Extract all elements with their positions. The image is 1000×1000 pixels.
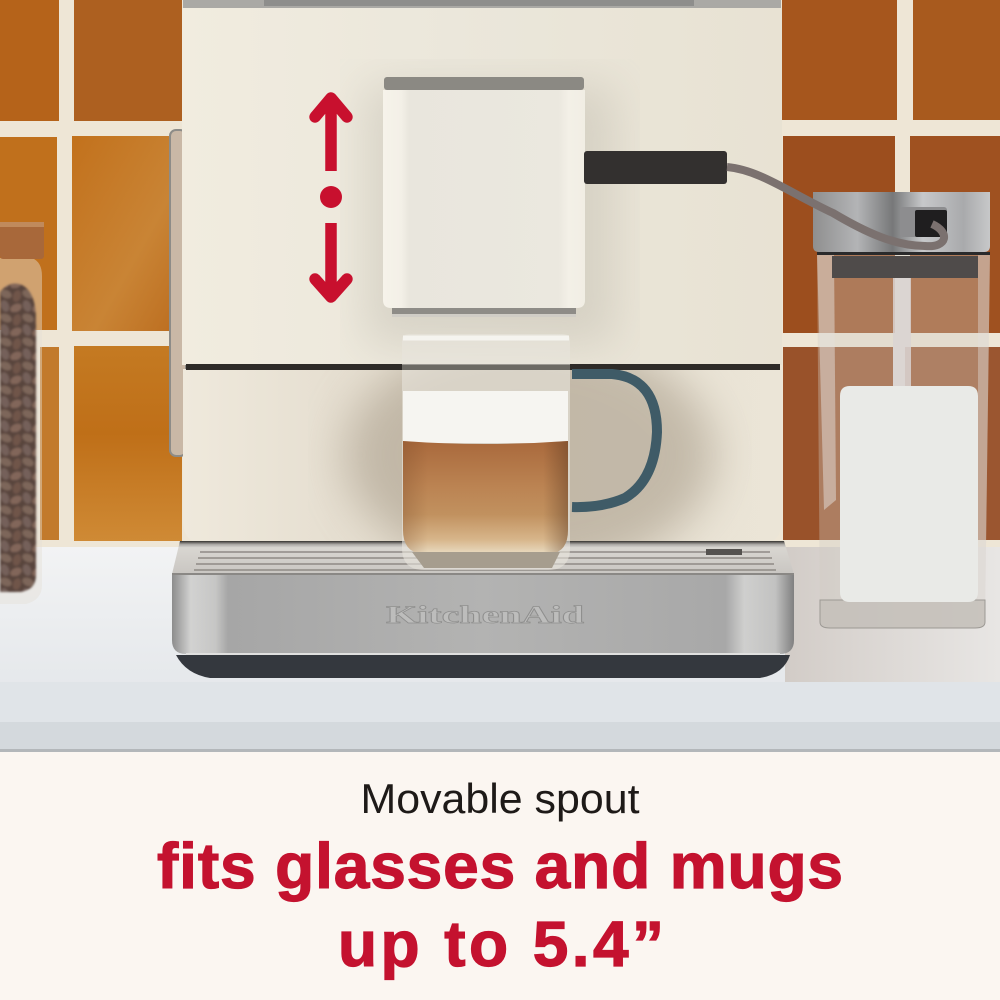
machine upper body: [182, 8, 636, 365]
machine body seam: [186, 364, 780, 370]
drip tray: [172, 541, 794, 678]
headline: fits glasses and mugs: [157, 830, 843, 902]
countertop: [0, 547, 1000, 752]
icon: coffee bean jar: [0, 222, 44, 604]
machine side handle: [170, 130, 186, 456]
spout: [383, 77, 585, 317]
brand name: KitchenAid: [386, 602, 584, 629]
milk container: [727, 167, 990, 628]
machine top trim: [183, 0, 781, 8]
icon: up and down arrows: [309, 98, 353, 297]
caption panel: [0, 752, 1000, 1000]
milk hose connector: [584, 151, 727, 184]
machine lower body: [183, 369, 739, 541]
headline: up to 5.4”: [338, 908, 664, 980]
caption line: Movable spout: Movable spout: [360, 775, 640, 822]
tiled wall background: [0, 0, 1000, 560]
headline: [157, 830, 843, 980]
glass mug of latte: [402, 334, 657, 570]
